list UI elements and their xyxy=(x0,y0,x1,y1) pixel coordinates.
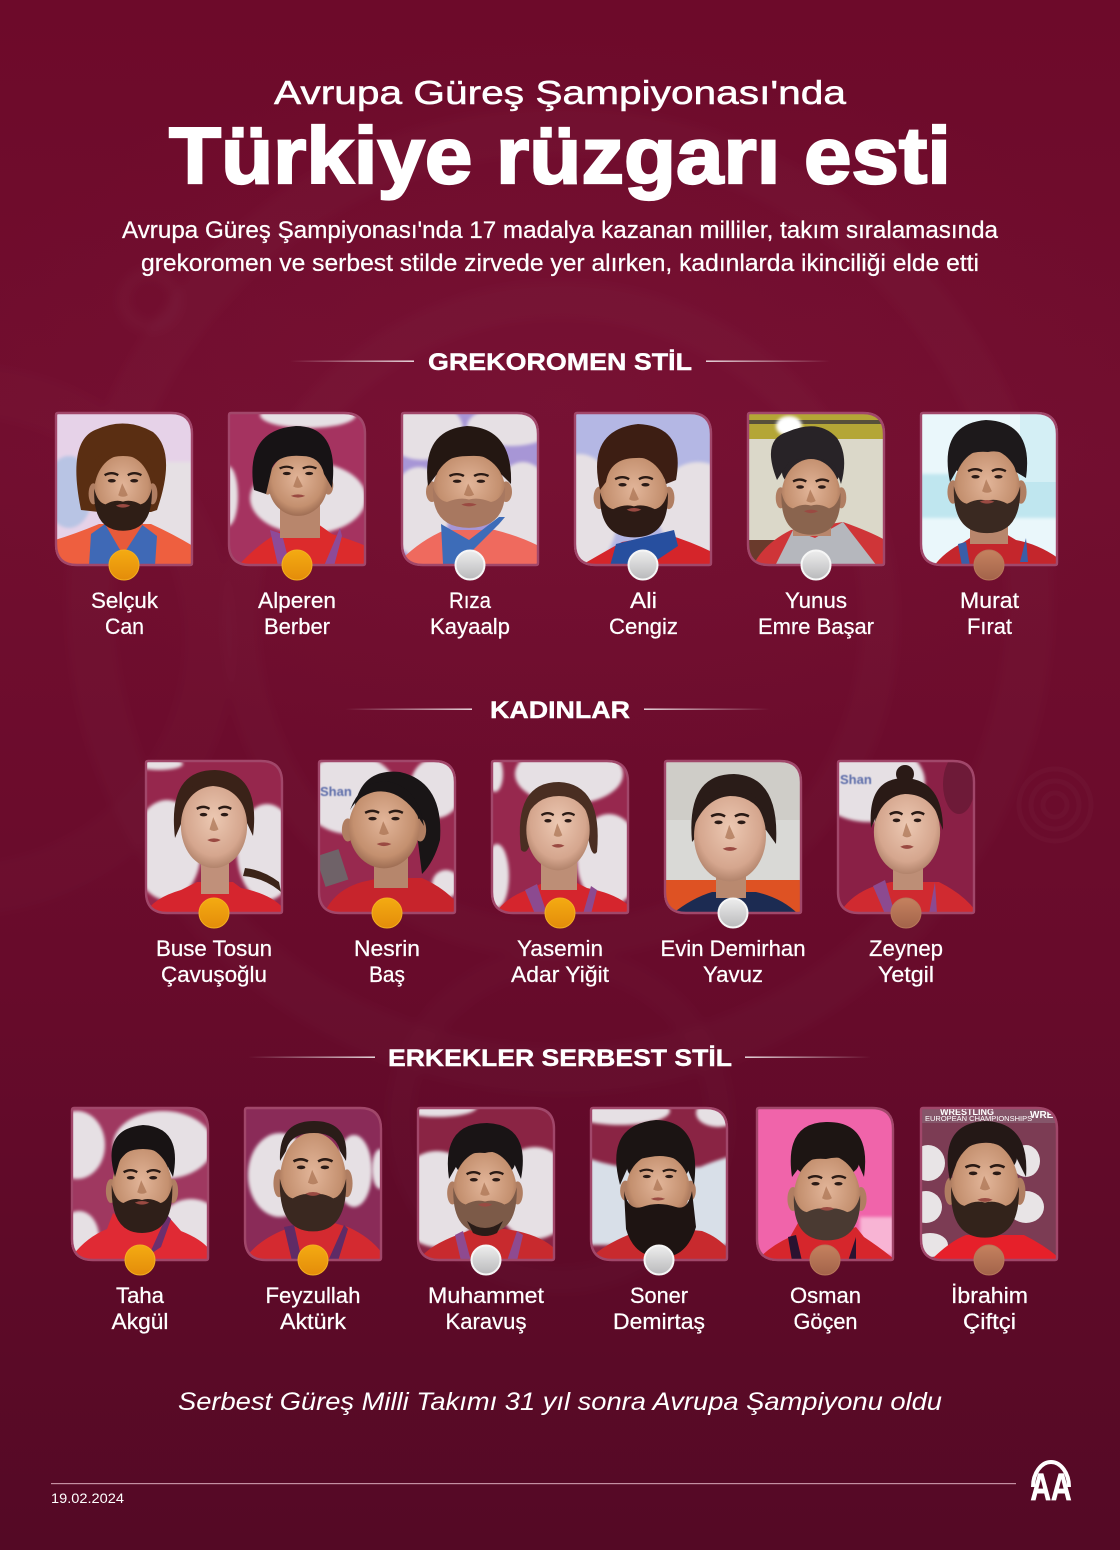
name xyxy=(112,1283,168,1334)
title xyxy=(169,74,951,200)
medal: gold xyxy=(199,898,229,928)
icon: AA logo: AA xyxy=(1030,1467,1072,1509)
heading: Erkekler Serbest Stil: ERKEKLER SERBEST STİL xyxy=(388,1045,732,1072)
athlete card: Ali Cengiz xyxy=(574,412,712,639)
name: Göçen xyxy=(794,1309,858,1334)
footer rule xyxy=(51,1483,1016,1484)
medal: gold xyxy=(109,550,139,580)
panel: Grekoromen athletes xyxy=(45,400,1058,639)
name: Buse Tosun xyxy=(156,936,272,961)
medal: gold xyxy=(545,898,575,928)
athlete card: Nesrin Baş xyxy=(318,760,456,987)
name xyxy=(354,936,420,987)
name: Fırat xyxy=(967,614,1013,639)
medal: silver xyxy=(802,550,830,580)
athlete card: Nesrin Baş: Shan xyxy=(320,784,352,799)
name: Adar Yiğit xyxy=(511,962,610,987)
panel: Women athletes xyxy=(133,742,975,987)
athlete card: Yasemin Adar Yiğit xyxy=(490,760,630,987)
name: Can xyxy=(105,614,144,639)
name: Muhammet xyxy=(428,1283,545,1308)
medal: gold xyxy=(298,1245,328,1275)
name: Kayaalp xyxy=(430,614,510,639)
athlete card: İbrahim Çiftçi: WRE xyxy=(1030,1110,1054,1121)
closing note: Serbest Güreş Milli Takımı 31 yıl sonra Avrupa Şampiyonu oldu xyxy=(178,1388,942,1416)
intro text: Avrupa Güreş Şampiyonası'nda 17 madalya kazanan milliler, takım sıralamasında xyxy=(122,217,999,244)
athlete card: Muhammet Karavuş xyxy=(416,1106,556,1334)
name: Alperen xyxy=(258,588,336,613)
name: Çiftçi xyxy=(963,1309,1016,1334)
name: Selçuk xyxy=(91,588,159,613)
medal: silver xyxy=(628,550,658,580)
panel: Freestyle athletes xyxy=(49,1097,1058,1334)
name xyxy=(869,936,943,987)
athlete card: Selçuk Can xyxy=(45,412,195,639)
medal: silver xyxy=(472,1246,500,1274)
medal: bronze xyxy=(891,898,921,928)
name: Emre Başar xyxy=(758,614,874,639)
name: Feyzullah xyxy=(266,1283,360,1308)
name xyxy=(430,588,510,639)
athlete card: Buse Tosun Çavuşoğlu xyxy=(144,760,284,987)
name: Berber xyxy=(264,614,330,639)
athlete card: Zeynep Yetgil: Shan xyxy=(840,772,872,787)
name: İbrahim xyxy=(951,1283,1028,1308)
name: Karavuş xyxy=(446,1309,526,1334)
name: Yasemin xyxy=(517,936,603,961)
name: Akgül xyxy=(112,1309,168,1334)
name xyxy=(609,588,678,639)
athlete card: Feyzullah Aktürk xyxy=(244,1107,388,1334)
name xyxy=(758,588,874,639)
name xyxy=(951,1283,1028,1334)
name: Baş xyxy=(369,962,405,987)
athlete card: Murat Fırat xyxy=(920,412,1058,639)
athlete card: Osman Göçen xyxy=(756,1107,894,1334)
name xyxy=(156,936,272,987)
medal: bronze xyxy=(810,1245,840,1275)
athlete card: Yunus Emre Başar xyxy=(747,412,885,639)
name xyxy=(258,588,336,639)
name: Yunus xyxy=(785,588,847,613)
name: Yetgil xyxy=(878,962,934,987)
name: Ali xyxy=(630,588,657,613)
name: Taha xyxy=(116,1283,164,1308)
name: Nesrin xyxy=(354,936,420,961)
medal: bronze xyxy=(974,550,1004,580)
name xyxy=(613,1283,705,1334)
athlete card: Evin Demirhan Yavuz xyxy=(660,760,806,987)
medal: silver xyxy=(718,898,748,928)
icon: AA logo xyxy=(1030,1462,1072,1509)
name xyxy=(428,1283,545,1334)
name: Aktürk xyxy=(280,1309,347,1334)
medal: silver xyxy=(644,1246,674,1274)
name: Çavuşoğlu xyxy=(161,962,267,987)
name xyxy=(91,588,159,639)
medal: bronze xyxy=(974,1245,1004,1275)
medal: gold xyxy=(282,550,312,580)
name: Osman xyxy=(790,1283,861,1308)
athlete card: Zeynep Yetgil xyxy=(836,760,976,987)
name: Evin Demirhan xyxy=(660,936,806,961)
date: 19.02.2024 xyxy=(51,1491,125,1506)
heading: Kadınlar: KADINLAR xyxy=(490,697,630,724)
name xyxy=(960,588,1020,639)
name: Demirtaş xyxy=(613,1309,705,1334)
name: Zeynep xyxy=(869,936,943,961)
athlete card: İbrahim Çiftçi: EUROPEAN CHAMPIONSHIPS xyxy=(925,1114,1032,1123)
medal: gold xyxy=(372,898,402,928)
name: Rıza xyxy=(449,588,491,613)
athlete card: İbrahim Çiftçi: WRESTLING xyxy=(940,1107,994,1117)
title: headline: Türkiye rüzgarı esti xyxy=(169,111,951,200)
athlete card: İbrahim Çiftçi xyxy=(910,1107,1058,1334)
name: Murat xyxy=(960,588,1020,613)
name: Yavuz xyxy=(703,962,763,987)
name xyxy=(660,936,806,987)
intro text: grekoromen ve serbest stilde zirvede yer alırken, kadınlarda ikinciliği elde etti xyxy=(141,250,979,277)
name xyxy=(266,1283,360,1334)
medal: silver xyxy=(456,550,484,580)
athlete card: Soner Demirtaş xyxy=(590,1106,728,1334)
name xyxy=(790,1283,861,1334)
name: Cengiz xyxy=(609,614,678,639)
athlete card: Rıza Kayaalp xyxy=(400,412,540,639)
title: kicker: Avrupa Güreş Şampiyonası'nda xyxy=(274,74,847,111)
athlete card: Taha Akgül xyxy=(70,1106,210,1334)
name xyxy=(511,936,610,987)
intro text xyxy=(122,217,999,277)
medal: gold xyxy=(125,1245,155,1275)
heading: Grekoromen Stil: GREKOROMEN STİL xyxy=(428,349,692,376)
name: Soner xyxy=(630,1283,688,1308)
athlete card: Alperen Berber xyxy=(228,412,366,634)
